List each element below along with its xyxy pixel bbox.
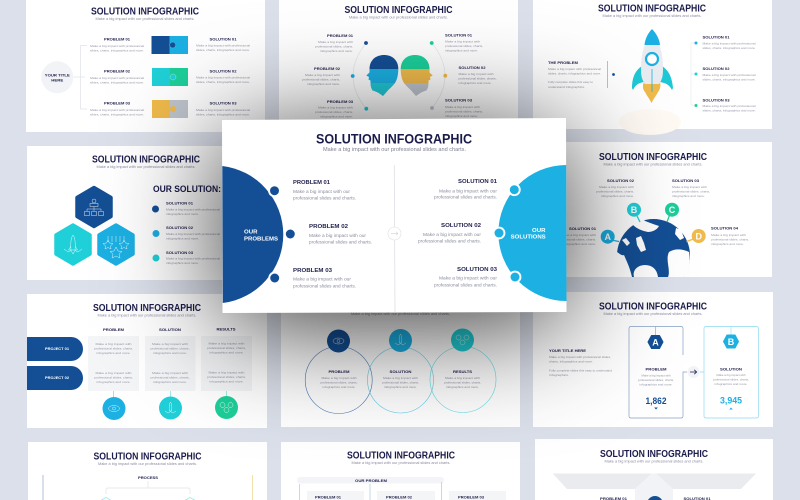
puzzle row 2: [152, 68, 188, 86]
problem 03: Make a big impact with our: [293, 276, 352, 282]
teal circle icon: [159, 391, 182, 420]
problem 01: Make a big impact with our: [293, 189, 351, 194]
intro text: Make a big impact with professional slides,: [549, 355, 611, 359]
solution 01: [702, 34, 756, 50]
problem box 02: PROBLEM 02: [386, 494, 413, 500]
solution 03: infographics and more.: [166, 261, 199, 265]
table text solution: infographics and more.: [153, 380, 187, 384]
problem text: Make a big impact with: [322, 376, 357, 380]
problem text: [320, 369, 358, 389]
problem 03: Make a big impact with: [318, 106, 353, 110]
intro text: Fully complete slides this easy to understand: [549, 368, 612, 372]
solution 02 text: [196, 69, 250, 84]
the problem text: Make a big impact with professional: [548, 67, 601, 71]
solution 03: professional slides and charts.: [434, 282, 497, 288]
solution 03: [166, 250, 220, 265]
solution 02: SOLUTION 02: [166, 225, 194, 230]
solution 04: professional slides, charts,: [711, 238, 749, 242]
main title: SOLUTION INFOGRAPHIC: [316, 132, 472, 146]
project 01 pill: [27, 337, 83, 361]
subtitle: Make a big impact with our professional slides and charts.: [98, 314, 197, 318]
column headers: SOLUTION: [159, 327, 181, 332]
problem 03: [315, 99, 354, 118]
problem 01: Make a big impact with: [318, 40, 353, 44]
puzzle row 3: [152, 100, 188, 118]
solution 02: [702, 66, 756, 82]
problem 03 text: slides, charts, infographics and more.: [90, 113, 144, 117]
problem 03: infographics and more.: [320, 114, 353, 118]
table text problem: infographics and more.: [96, 380, 131, 384]
problem 03 text: PROBLEM 03: [104, 101, 131, 106]
hexagon blue with stars icon: [99, 225, 133, 264]
pin A: [601, 230, 619, 244]
solution 02: Make a big impact with: [458, 72, 494, 76]
center panel: [635, 474, 673, 500]
solution dots: [493, 183, 521, 283]
solution 01: infographics and more.: [166, 212, 199, 216]
solution 01: [434, 179, 498, 200]
the problem text: THE PROBLEM: [548, 60, 579, 65]
hexagon navy with org chart icon: [77, 188, 111, 226]
left half circle: our problems: PROBLEMS: [244, 236, 279, 242]
table text solution: infographics and more.: [153, 351, 187, 355]
title: SOLUTION INFOGRAPHIC: [600, 449, 708, 460]
solution 02: slides, charts, infographics and more.: [702, 78, 756, 82]
table text results: Make a big impact with: [208, 342, 245, 346]
slide: projects table: [27, 294, 267, 428]
pin C: C: [669, 205, 676, 215]
solution 01 text: slides, charts, infographics and more.: [196, 48, 250, 52]
problem 02 text: PROBLEM 02: [104, 69, 131, 74]
results text: Make a big impact with: [445, 376, 480, 380]
pin A: A: [604, 232, 611, 242]
problem 02 text: slides, charts, infographics and more.: [90, 81, 144, 85]
slide: globe with pins: [566, 142, 772, 277]
process label: PROCESS: [138, 475, 158, 480]
title: SOLUTION INFOGRAPHIC: [347, 450, 455, 462]
problem 01 text: Make a big impact with professional: [90, 44, 144, 48]
title: SOLUTION INFOGRAPHIC: [599, 152, 707, 163]
problem 02: PROBLEM 02: [314, 66, 341, 71]
problem 03 text: Make a big impact with professional: [90, 108, 144, 112]
table text solution: Make a big impact with: [152, 342, 188, 346]
solution 03: Make a big impact with professional: [702, 104, 756, 108]
your title circle: [41, 61, 73, 93]
table text results: professional slides, charts,: [207, 375, 246, 379]
column panels: [88, 336, 252, 391]
solution 02: infographics and more.: [166, 237, 199, 241]
solution 04: infographics and more.: [711, 242, 744, 246]
problem 02: [309, 224, 372, 244]
solution 02: Make a big impact with: [599, 185, 634, 189]
solution 01: SOLUTION 01: [702, 34, 730, 40]
problem text: professional slides, charts,: [320, 380, 358, 384]
solution 03: [702, 98, 756, 112]
solution ring: [368, 329, 434, 413]
card B: SOLUTION: [720, 366, 742, 372]
title: SOLUTION INFOGRAPHIC: [598, 4, 706, 14]
intro text: charts, infographics and more.: [549, 360, 593, 364]
subtitle: Make a big impact with our professional slides and charts.: [602, 14, 702, 18]
solution 02 text: SOLUTION 02: [210, 69, 237, 74]
project 02 pill: PROJECT 02: [45, 375, 70, 380]
project 01 pill: PROJECT 01: [45, 346, 70, 351]
solution 01: professional slides, charts,: [445, 44, 483, 48]
subtitle: Make a big impact with our professional slides and charts.: [349, 15, 448, 19]
your title circle: YOUR TITLE: [45, 72, 70, 78]
problem 03: [293, 268, 356, 288]
the problem text: slides, charts, infographics and more.: [548, 72, 601, 76]
problem 01 text: slides, charts, infographics and more.: [90, 49, 144, 53]
intro text: YOUR TITLE HERE: [549, 348, 586, 353]
solution 01 text: Make a big impact with professional: [196, 44, 250, 48]
solution 01: Make a big impact with: [561, 233, 596, 237]
problem 02: [302, 66, 341, 86]
solution text: infographics and more.: [384, 385, 417, 389]
center circle: [647, 496, 663, 500]
left half circle: our problems: OUR: [244, 230, 258, 236]
solution 01: SOLUTION 01: [445, 32, 473, 38]
card B: 3,945: [720, 396, 743, 406]
results ring: [430, 328, 496, 412]
your title circle: HERE: [51, 78, 64, 82]
table text results: [207, 342, 246, 384]
main subtitle: Make a big impact with our professional slides and charts.: [323, 147, 466, 153]
results text: RESULTS: [453, 369, 472, 374]
solution 01: [166, 200, 220, 216]
solution 04: [711, 226, 749, 246]
solution 03: slides, charts, infographics and more.: [702, 108, 756, 112]
solution 02: Make a big impact with professional: [166, 232, 220, 236]
solution 02: Make a big impact with professional: [702, 73, 756, 77]
green circle icon: [215, 391, 238, 419]
solution 01: SOLUTION 01: [166, 200, 194, 206]
table text solution: [150, 342, 190, 384]
solution 01: professional slides and charts.: [434, 194, 497, 200]
card A: [629, 326, 687, 418]
table text solution: Make a big impact with: [152, 371, 188, 375]
problem 02: PROBLEM 02: [309, 224, 348, 230]
center arrow button: [388, 227, 401, 240]
pin D: [686, 229, 706, 243]
problem dots: [268, 184, 297, 284]
solution 03 text: [196, 101, 250, 117]
card A: A: [652, 337, 659, 347]
title: SOLUTION INFOGRAPHIC: [91, 6, 199, 18]
solution 01: Make a big impact with professional: [702, 42, 756, 46]
solution 01: [445, 32, 483, 52]
solution 02: professional slides, charts,: [596, 190, 634, 194]
problem ring: [305, 330, 372, 414]
divider and dot: [608, 61, 615, 88]
solution 03: Make a big impact with: [672, 185, 707, 189]
the problem text: understand infographics.: [548, 85, 585, 89]
solution 03: infographics and more.: [672, 194, 705, 198]
table text results: infographics and more.: [210, 350, 244, 354]
problem 01: [293, 180, 356, 200]
subtitle: Make a big impact with our professional slides and charts.: [351, 312, 450, 316]
pin C: [665, 203, 679, 222]
card B: [700, 326, 758, 418]
problem box 02: [377, 491, 435, 500]
solution 01: professional slides, charts,: [558, 238, 596, 242]
hexagon teal with rocket icon: [56, 225, 90, 264]
card B: infographics and more.: [714, 382, 748, 386]
table text problem: professional slides, charts,: [94, 376, 133, 380]
right half circle: our solutions: [493, 165, 566, 301]
table text results: Make a big impact with: [208, 370, 245, 374]
card A: 1,862: [646, 396, 666, 407]
solution 03 text: SOLUTION 03: [210, 101, 237, 106]
solution bullets: [152, 206, 160, 262]
problem 01 text: PROBLEM 01: [104, 37, 131, 42]
pin B: [627, 203, 641, 222]
card B: professional slides, charts,: [713, 378, 749, 382]
problem 02: Make a big impact with our: [309, 233, 367, 238]
head dots: [351, 41, 447, 111]
subtitle: Make a big impact with our professional slides and charts.: [98, 462, 197, 466]
problem 01: PROBLEM 01: [293, 180, 330, 186]
card A: professional slides, charts,: [638, 378, 674, 382]
title: SOLUTION INFOGRAPHIC: [94, 452, 202, 462]
solution 02: infographics and more.: [458, 81, 492, 85]
slide: problem to solution cards: [533, 292, 773, 427]
solution 01: [558, 226, 597, 246]
right head: [401, 55, 433, 96]
solution 01: Make a big impact with: [445, 40, 480, 44]
problem 01 text: [90, 37, 144, 53]
problem 03: professional slides, charts,: [315, 110, 353, 114]
subtitle: Make a big impact with our professional slides and charts.: [604, 460, 704, 464]
card B: Make a big impact with: [716, 373, 746, 377]
solution 03: [434, 267, 498, 288]
solution 01: infographics and more.: [445, 48, 478, 52]
problem 02: infographics and more.: [307, 82, 340, 86]
solution 03: infographics and more.: [445, 114, 478, 118]
main slide: [222, 118, 566, 313]
blue circle icon: [102, 391, 126, 420]
column headers: RESULTS: [216, 326, 236, 332]
puzzle row 1: [152, 36, 188, 54]
subtitle: Make a big impact with our professional slides and charts.: [96, 165, 196, 169]
problem 01: professional slides and charts.: [293, 196, 356, 200]
problem box 03: [449, 491, 506, 500]
table text problem: professional slides, charts,: [94, 346, 133, 350]
solution 01: SOLUTION 01: [569, 226, 597, 231]
solution 03: SOLUTION 03: [457, 267, 497, 273]
card B: B: [728, 337, 735, 347]
solution 02: [418, 223, 482, 244]
smoke: [619, 109, 681, 135]
problem 01: infographics and more.: [320, 49, 353, 53]
solution 02: [166, 225, 220, 241]
problem text: PROBLEM: [328, 369, 350, 374]
problem 03 text: [90, 101, 144, 117]
solution 03: SOLUTION 03: [445, 98, 473, 102]
project 02 pill: [27, 366, 83, 390]
right half circle: our solutions: SOLUTIONS: [511, 234, 546, 240]
solution 02: SOLUTION 02: [702, 66, 730, 71]
left half circle: our problems: [222, 166, 297, 303]
table text results: professional slides, charts,: [207, 346, 246, 350]
the problem text: [548, 60, 601, 89]
title: SOLUTION INFOGRAPHIC: [93, 303, 201, 314]
solution 02: SOLUTION 02: [607, 178, 635, 183]
right side line: [252, 475, 254, 500]
solution 02: [458, 65, 497, 85]
table text results: infographics and more.: [210, 380, 244, 384]
solution 01: Make a big impact with our: [439, 188, 498, 194]
problem 02: Make a big impact with: [305, 73, 340, 77]
results text: professional slides, charts,: [444, 380, 481, 384]
table text problem: Make a big impact with: [96, 371, 132, 375]
card A: Make a big impact with: [642, 374, 671, 378]
problem 01: [315, 33, 354, 53]
title: SOLUTION INFOGRAPHIC: [599, 302, 707, 312]
problem box 03: PROBLEM 03: [458, 494, 485, 500]
solution 02 text: Make a big impact with professional: [196, 76, 250, 80]
left head: [366, 55, 398, 96]
solution bracket: [691, 42, 698, 107]
problem 03: professional slides and charts.: [293, 284, 356, 288]
solution 02: SOLUTION 02: [441, 223, 481, 229]
globe: [617, 219, 690, 277]
card A: PROBLEM: [646, 366, 667, 372]
subtitle: Make a big impact with our professional slides and charts.: [96, 17, 195, 21]
solution text: [382, 369, 419, 389]
process tree: [98, 481, 198, 500]
solution 03: Make a big impact with: [445, 105, 480, 109]
slide: our solution hexagons: [27, 146, 266, 280]
solution 02 text: slides, charts, infographics and more.: [196, 80, 250, 84]
solution text: professional slides, charts,: [382, 380, 419, 384]
problem box 01: PROBLEM 01: [315, 494, 342, 500]
slide: puzzle problem and solution: [26, 0, 265, 132]
title: SOLUTION INFOGRAPHIC: [92, 154, 200, 166]
right half circle: our solutions: OUR: [532, 228, 546, 234]
solution 03: professional slides, charts,: [445, 110, 483, 114]
card A: infographics and more.: [640, 382, 673, 386]
column headers: PROBLEM: [103, 327, 125, 332]
intro text: infographics.: [549, 373, 569, 377]
solution text: SOLUTION: [390, 369, 412, 374]
problem 02 text: [90, 69, 144, 85]
column lines: [300, 482, 442, 500]
left side line: [42, 475, 44, 500]
solution 04: SOLUTION 04: [711, 226, 739, 230]
solution 03: Make a big impact with our: [439, 276, 498, 280]
subtitle: Make a big impact with our professional slides and charts.: [604, 312, 703, 316]
problem 01: professional slides, charts,: [315, 44, 353, 48]
slide: our problem columns: [281, 442, 520, 500]
solution 01: slides, charts, infographics and more.: [702, 46, 756, 50]
column headers: [103, 326, 236, 332]
solution 02: SOLUTION 02: [458, 65, 486, 70]
solution 02: professional slides, charts,: [458, 76, 497, 80]
problem 01: PROBLEM 01: [327, 33, 354, 38]
slide: process: [28, 442, 267, 500]
table text problem: [94, 342, 133, 384]
solution 01 text: SOLUTION 01: [210, 36, 237, 42]
solution 02: professional slides and charts.: [418, 238, 481, 244]
table text solution: professional slides, charts,: [150, 346, 190, 350]
pin D: D: [695, 231, 702, 241]
table text problem: Make a big impact with: [96, 342, 132, 346]
solution 02: Make a big impact with our: [423, 232, 482, 237]
solution 01: SOLUTION 01: [458, 179, 497, 185]
solution 04: Make a big impact with: [711, 233, 746, 237]
solution 03: SOLUTION 03: [672, 178, 700, 183]
problem 03: PROBLEM 03: [293, 268, 332, 274]
intro text: [549, 348, 612, 377]
solution 03: [672, 178, 710, 198]
table text problem: infographics and more.: [96, 351, 131, 355]
our problem bar: [297, 477, 444, 484]
solution 01: infographics and more.: [563, 242, 596, 246]
solution 03: SOLUTION 03: [702, 98, 730, 102]
subtitle: Make a big impact with our professional slides and charts.: [352, 461, 451, 465]
problem 03: PROBLEM 03: [327, 99, 354, 104]
our problem bar: OUR PROBLEM: [355, 478, 388, 483]
solution 03 text: slides, charts, infographics and more.: [196, 113, 250, 117]
problem box 01: [307, 491, 364, 500]
slide: funnel problem and solution: [535, 439, 773, 500]
problem 02 text: Make a big impact with professional: [90, 76, 144, 80]
solution 03: Make a big impact with professional: [166, 256, 220, 260]
arrow button: [688, 366, 700, 378]
slide: overlapping circles: [281, 300, 520, 427]
solution 03: [445, 98, 483, 118]
right trapezoid: [656, 474, 756, 489]
left trapezoid: [553, 474, 652, 489]
center divider: [393, 165, 396, 312]
results text: [444, 369, 481, 389]
table text solution: professional slides, charts,: [150, 376, 190, 380]
problem 02: professional slides, charts,: [302, 78, 340, 82]
slide: two heads: [279, 0, 518, 120]
solution 01 text: [196, 36, 250, 52]
solution text: Make a big impact with: [383, 376, 418, 380]
title: SOLUTION INFOGRAPHIC: [344, 5, 452, 16]
the problem text: Fully complete slides this easy to: [548, 80, 593, 84]
heading: our solution: OUR SOLUTION:: [153, 184, 221, 195]
subtitle: Make a big impact with our professional slides and charts.: [604, 162, 703, 166]
main slide background: [222, 118, 566, 313]
solution 01: Make a big impact with professional: [166, 208, 220, 212]
problem 02: professional slides and charts.: [309, 240, 372, 244]
solution 03: professional slides, charts,: [672, 190, 710, 194]
problem text: infographics and more.: [322, 385, 356, 389]
pin B: B: [631, 205, 638, 215]
solution 03: SOLUTION 03: [166, 250, 194, 255]
solution 02: [596, 178, 635, 198]
solution 03 text: Make a big impact with professional: [196, 108, 250, 112]
solution 02: infographics and more.: [601, 194, 634, 198]
results text: infographics and more.: [446, 385, 479, 389]
slide: rocket: [533, 0, 772, 135]
rocket: [632, 29, 673, 103]
